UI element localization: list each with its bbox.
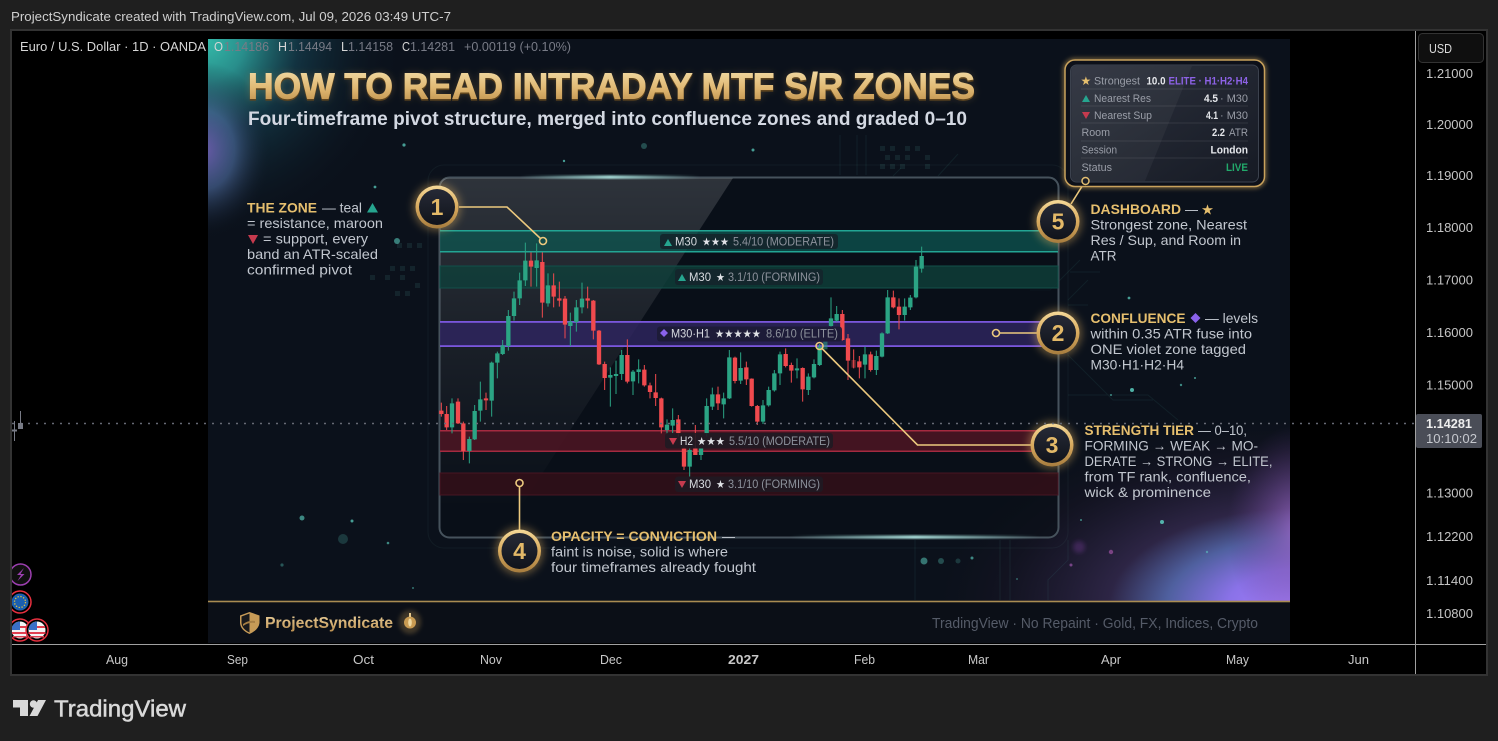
panel: dashboard: Session: [1082, 144, 1117, 156]
text block: the zone: [247, 200, 383, 278]
zone label: M30 3.1 resistance: 3.1/10 (FORMING): [728, 272, 820, 284]
TradingView logo: TradingView: [54, 696, 187, 722]
resistance band 3.1: [440, 266, 1058, 288]
zone label: M30 5.4: [660, 234, 838, 249]
price axis: 1.11400: [1426, 574, 1473, 588]
badge 4: 4: [513, 538, 526, 564]
support band 5.5: [440, 430, 1058, 452]
zone label: M30 3.1 resistance: ★: [716, 272, 725, 284]
panel: dashboard: 10.0: [1146, 76, 1166, 88]
callout 5 leader: [1070, 187, 1082, 204]
zone label: M30 3.1 support: ★: [716, 479, 725, 491]
zone label: M30-H1 elite: M30·H1: [671, 328, 710, 340]
legend row: O: [214, 40, 223, 54]
zone label: H2 5.5: 5.5/10 (MODERATE): [729, 436, 830, 448]
price axis: 1.17000: [1426, 274, 1473, 288]
text block: dashboard: ★: [1201, 202, 1214, 218]
callout 2 leader: [992, 330, 1037, 336]
text block: opacity: —: [722, 528, 735, 544]
time axis: Apr: [1101, 653, 1121, 667]
text block: dashboard: ATR: [1090, 248, 1116, 264]
text block: strength tier: [1083, 422, 1272, 500]
title: HOW TO READ INTRADAY MTF S/R ZONES: [248, 66, 975, 106]
price axis: 1.15000: [1426, 378, 1473, 392]
badge 3: 3: [1046, 432, 1058, 458]
time axis: 2027: [728, 653, 759, 667]
badge 2: [1034, 309, 1082, 357]
time axis: Sep: [227, 653, 248, 667]
time axis: [106, 653, 1369, 667]
badge 1: [413, 183, 461, 231]
legend row: 1.14186: [224, 40, 269, 54]
text block: confluence: M30·H1·H2·H4: [1090, 356, 1184, 372]
text block: the zone: = resistance, maroon: [247, 215, 383, 231]
panel: dashboard: 4.1: [1206, 110, 1218, 122]
time axis: Jun: [1348, 653, 1369, 667]
legend row: 1.14158: [348, 40, 393, 54]
time axis: Oct: [353, 653, 375, 667]
callout 1 leader: [459, 207, 546, 244]
price axis: 1.21000: [1426, 67, 1473, 81]
badge 1: 1: [431, 194, 444, 220]
panel: dashboard: ★: [1080, 74, 1091, 88]
time axis: Mar: [968, 653, 989, 667]
legend row: H: [278, 40, 287, 54]
mini candles at left edge: [12, 411, 23, 441]
callout 4 leader: [516, 480, 523, 530]
legend row: C: [402, 40, 410, 54]
text block: strength tier: FORMING → WEAK → MO-: [1084, 438, 1258, 454]
text block: the zone: THE ZONE: [247, 200, 317, 216]
zone label: M30 3.1 support: 3.1/10 (FORMING): [728, 479, 820, 491]
header attribution: ProjectSyndicate created with TradingView.com, Jul 09, 2026 03:49 UTC-7: [11, 10, 451, 24]
candlestick chart: [441, 243, 922, 477]
time axis: Aug: [106, 653, 128, 667]
text block: strength tier: from TF rank, confluence,: [1084, 468, 1251, 484]
text block: dashboard: Strongest zone, Nearest: [1090, 216, 1247, 232]
current price tag: [1416, 414, 1482, 448]
text block: the zone: confirmed pivot: [247, 262, 352, 278]
panel: dashboard: Room: [1082, 127, 1110, 139]
text block: dashboard: [1090, 204, 1247, 260]
text block: the zone: band an ATR-scaled: [247, 246, 378, 262]
badge 5: 5: [1052, 208, 1065, 234]
title: HOW TO READ INTRADAY MTF S/R ZONES: [248, 66, 975, 107]
legend row: 1.14281: [410, 40, 455, 54]
zone label: H2 5.5: [665, 433, 833, 448]
price axis: 1.18000: [1426, 221, 1473, 235]
zone label: M30-H1 elite: [657, 326, 842, 342]
text block: confluence: CONFLUENCE: [1090, 310, 1186, 326]
badge 5: [1034, 198, 1082, 246]
badge 4: [496, 527, 544, 575]
text block: opacity: faint is noise, solid is where: [551, 544, 728, 560]
panel: chart glass frame: [428, 165, 1068, 548]
price axis: 1.19000: [1426, 169, 1473, 183]
zone label: M30 5.4: 5.4/10 (MODERATE): [733, 236, 834, 248]
zone label: M30 5.4: M30: [675, 236, 697, 248]
panel: dashboard: · M30: [1220, 110, 1248, 122]
price axis: 1.12200: [1426, 530, 1473, 544]
panel: dashboard: Strongest: [1094, 76, 1140, 88]
legend row: [20, 40, 571, 54]
price dotted line: [12, 422, 1415, 424]
subtitle: Four-timeframe pivot structure, merged into confluence zones and graded 0–10: [248, 109, 967, 130]
brand name: ProjectSyndicate: [265, 615, 393, 632]
text block: strength tier: wick & prominence: [1083, 484, 1211, 500]
footer: [208, 600, 1290, 602]
time axis: Feb: [854, 653, 875, 667]
resistance band 5.4: [440, 230, 1058, 252]
time axis: May: [1226, 653, 1250, 667]
text block: opacity: [551, 528, 756, 575]
text block: dashboard: DASHBOARD: [1090, 201, 1181, 217]
current price tag: 10:10:02: [1426, 432, 1477, 446]
panel: dashboard: · M30: [1220, 93, 1248, 105]
text block: dashboard: Res / Sup, and Room in: [1090, 232, 1241, 248]
zone label: M30-H1 elite: ★★★★★: [715, 328, 761, 340]
zone label: M30-H1 elite: 8.6/10 (ELITE): [766, 328, 838, 340]
price axis: 1.20000: [1426, 118, 1473, 132]
zone label: M30 3.1 support: [675, 476, 823, 492]
legend row: Euro / U.S. Dollar · 1D · OANDA: [20, 40, 207, 54]
support band 3.1: [440, 473, 1058, 495]
panel: dashboard: ATR: [1229, 127, 1248, 139]
confluence band: [440, 321, 1058, 347]
callout 3 leader: [816, 342, 1031, 445]
zone label: M30 3.1 support: M30: [689, 479, 711, 491]
price axis: 1.16000: [1426, 326, 1473, 340]
badge 2: 2: [1052, 320, 1064, 346]
footer tagline: TradingView · No Repaint · Gold, FX, Indices, Crypto: [932, 616, 1258, 632]
title: HOW TO READ INTRADAY MTF S/R ZONES: [248, 67, 975, 108]
badge 3: [1028, 421, 1076, 469]
time axis: Dec: [600, 653, 622, 667]
panel: dashboard: Nearest Res: [1094, 93, 1151, 105]
zone label: M30 3.1 resistance: [675, 269, 823, 285]
price axis: 1.13000: [1426, 486, 1473, 500]
legend row: L: [341, 40, 348, 54]
panel: dashboard: Status: [1082, 162, 1112, 174]
text block: the zone: = support, every: [263, 230, 368, 246]
panel: dashboard: 2.2: [1212, 127, 1225, 139]
zone label: M30 3.1 resistance: M30: [689, 272, 711, 284]
text block: opacity: four timeframes already fought: [551, 559, 756, 575]
icon: shield logo: [240, 612, 260, 634]
text block: confluence: ONE violet zone tagged: [1090, 341, 1246, 357]
price axis: USD: [1429, 42, 1452, 56]
zone label: H2 5.5: ★★★: [697, 436, 725, 448]
text block: strength tier: — 0–10,: [1198, 422, 1247, 438]
text block: strength tier: STRENGTH TIER: [1084, 422, 1194, 438]
price axis: 1.10800: [1426, 607, 1473, 621]
text block: confluence: [1090, 313, 1258, 370]
text block: confluence: within 0.35 ATR fuse into: [1089, 326, 1252, 342]
text block: confluence: — levels: [1205, 310, 1258, 326]
event icons: [9, 564, 48, 641]
legend row: +0.00119 (+0.10%): [464, 40, 571, 54]
text block: dashboard: —: [1185, 201, 1198, 217]
time axis: Nov: [480, 653, 503, 667]
icon: medal: [399, 610, 421, 634]
zone label: H2 5.5: H2: [680, 436, 693, 448]
panel: dashboard: London: [1210, 144, 1248, 156]
legend row: 1.14494: [288, 40, 332, 54]
text block: strength tier: DERATE → STRONG → ELITE,: [1084, 453, 1272, 469]
panel: dashboard: [1065, 60, 1264, 186]
panel: dashboard: 4.5: [1204, 93, 1218, 105]
text block: the zone: — teal: [322, 200, 362, 216]
panel: dashboard: ELITE · H1·H2·H4: [1168, 76, 1249, 88]
text block: opacity: OPACITY = CONVICTION: [551, 528, 717, 544]
infographic image: [208, 39, 1290, 643]
zone label: M30 5.4: ★★★: [702, 236, 729, 248]
current price tag: 1.14281: [1426, 417, 1472, 431]
panel: dashboard: LIVE: [1226, 162, 1248, 174]
panel: dashboard: Nearest Sup: [1094, 110, 1152, 122]
